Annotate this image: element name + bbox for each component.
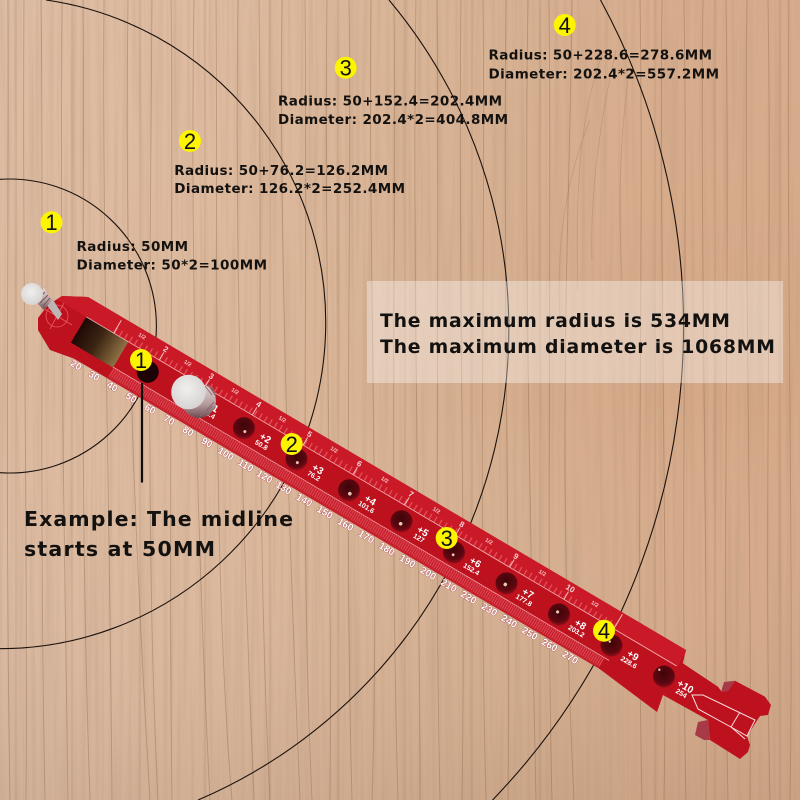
red ruler [7,266,771,759]
millimetre scale numbers: 40 [104,380,120,395]
inch scale numbers: 1/2 [431,506,441,515]
hole labels: +8 [572,617,588,633]
lower mm scale band [105,367,605,672]
step 2 text [174,129,405,197]
top inch scale band [56,296,686,666]
inch scale numbers: 2 [161,344,170,355]
inch scale numbers: 7 [407,489,416,500]
millimetre scale numbers: 100 [216,445,236,464]
example note [24,507,293,561]
inch scale numbers: 1/2 [484,537,493,547]
millimetre scale numbers: 180 [376,541,397,559]
inch scale numbers: 1/2 [329,446,338,455]
millimetre scale numbers: 50 [123,391,139,406]
millimetre scale numbers: 220 [458,589,479,607]
step 4 text: Radius: 50+228.6=278.6MM [488,47,712,63]
millimetre scale numbers: 140 [294,492,314,510]
millimetre scale numbers: 170 [356,528,376,547]
hole labels: 25.4 [201,408,216,421]
ruler marker 1 [130,348,152,373]
step 2 text: Radius: 50+76.2=126.2MM [174,163,388,179]
ruler marker 4: 4 [598,619,610,644]
inch scale numbers: 1/2 [537,569,547,578]
step 3 text [278,56,508,128]
ruler marker 3 [436,526,458,551]
hole labels: 76.2 [306,470,321,483]
callout box: maximum radius and diameter: The maximum diameter is 1068MM [380,337,775,358]
hole labels [201,400,695,702]
millimetre scale numbers: 160 [335,516,356,534]
millimetre scale numbers: 90 [199,436,215,451]
inch scale numbers: 5 [305,429,314,440]
step 4 text: Diameter: 202.4*2=557.2MM [488,66,719,82]
inch scale numbers: 4 [254,399,263,410]
inch scale numbers: 1/2 [590,600,599,609]
inch scale numbers: 10 [564,582,577,595]
step 4 text: 4 [559,13,571,38]
hole labels: 203.2 [567,625,585,640]
step 2 text: Diameter: 126.2*2=252.4MM [174,181,405,197]
hole labels: 254 [674,688,688,700]
inch scale numbers: 3 [207,371,216,382]
callout box: maximum radius and diameter: The maximum radius is 534MM [380,311,730,332]
example note: starts at 50MM [24,537,215,561]
step 3 text: 3 [340,56,352,81]
hole labels: +1 [205,400,221,416]
example note: Example: The midline [24,507,293,531]
millimetre scale numbers: 200 [418,565,438,583]
millimetre scale numbers: 30 [86,369,102,384]
hole labels: +6 [467,555,483,571]
millimetre scale numbers: 150 [315,504,335,522]
millimetre scale numbers: 260 [539,637,560,655]
millimetre scale numbers: 210 [438,577,459,595]
millimetre scale numbers: 120 [254,468,275,487]
step 4 text [488,13,719,82]
step 3 text: Radius: 50+152.4=202.4MM [278,93,502,109]
callout box: maximum radius and diameter [367,281,783,383]
step 1 text: Diameter: 50*2=100MM [76,257,267,273]
hole labels: 127 [412,533,425,545]
millimetre scale numbers: 110 [236,457,255,475]
hole labels: 101.6 [357,500,375,515]
hole labels: 228.6 [619,656,638,671]
hole labels: 50.8 [253,439,269,452]
inch scale numbers: 1/2 [277,415,287,424]
millimetre scale numbers: 270 [560,649,580,667]
ruler marker 4 [593,619,615,644]
hole labels: +7 [520,586,536,602]
ruler marker 2 [281,432,303,457]
sliding knob [171,375,216,418]
step 3 text: Diameter: 202.4*2=404.8MM [278,112,508,128]
millimetre scale numbers: 70 [161,413,177,429]
inch scale numbers: 8 [458,519,466,530]
step 1 text [40,210,267,273]
hole labels: +3 [310,462,326,478]
millimetre scale numbers: 20 [68,358,84,374]
millimetre scale numbers [68,358,580,667]
step 1 text: 1 [45,210,58,235]
ruler marker 2: 2 [286,432,298,457]
millimetre scale numbers: 240 [499,613,519,631]
millimetre scale numbers: 130 [273,480,294,498]
millimetre scale numbers: 190 [397,553,417,571]
inch scale numbers: 6 [355,459,364,469]
scale lines and ticks [69,302,685,696]
pivot crosshair [43,303,72,329]
inch scale numbers: 1/2 [380,476,389,485]
holes [133,356,679,692]
ruler marker 3: 3 [441,526,453,551]
inch scale numbers: 1/2 [137,332,146,341]
hole labels: +10 [675,678,695,697]
hole labels: +2 [257,431,273,447]
inch scale numbers: 9 [512,551,521,562]
hole labels: +5 [415,524,431,540]
hole labels: +4 [362,493,378,509]
end notches [695,681,735,740]
hole labels: 152.4 [462,562,480,577]
end point outline [692,695,755,739]
millimetre scale numbers: 80 [180,424,196,440]
hole labels: +9 [625,649,641,664]
millimetre scale numbers: 230 [479,601,499,619]
millimetre scale numbers: 60 [142,402,158,417]
inch scale numbers: 1/2 [230,387,239,396]
inch scale numbers [137,330,601,609]
pivot pin [21,283,62,320]
hole labels: 177.8 [514,593,533,608]
inch scale numbers: 1/2 [182,359,192,368]
step 2 text: 2 [184,129,196,154]
window slot [71,317,128,368]
ruler marker 1: 1 [135,348,147,373]
step 1 text: Radius: 50MM [76,239,188,255]
millimetre scale numbers: 250 [519,625,540,643]
pointer line from marker 1 [141,383,143,482]
